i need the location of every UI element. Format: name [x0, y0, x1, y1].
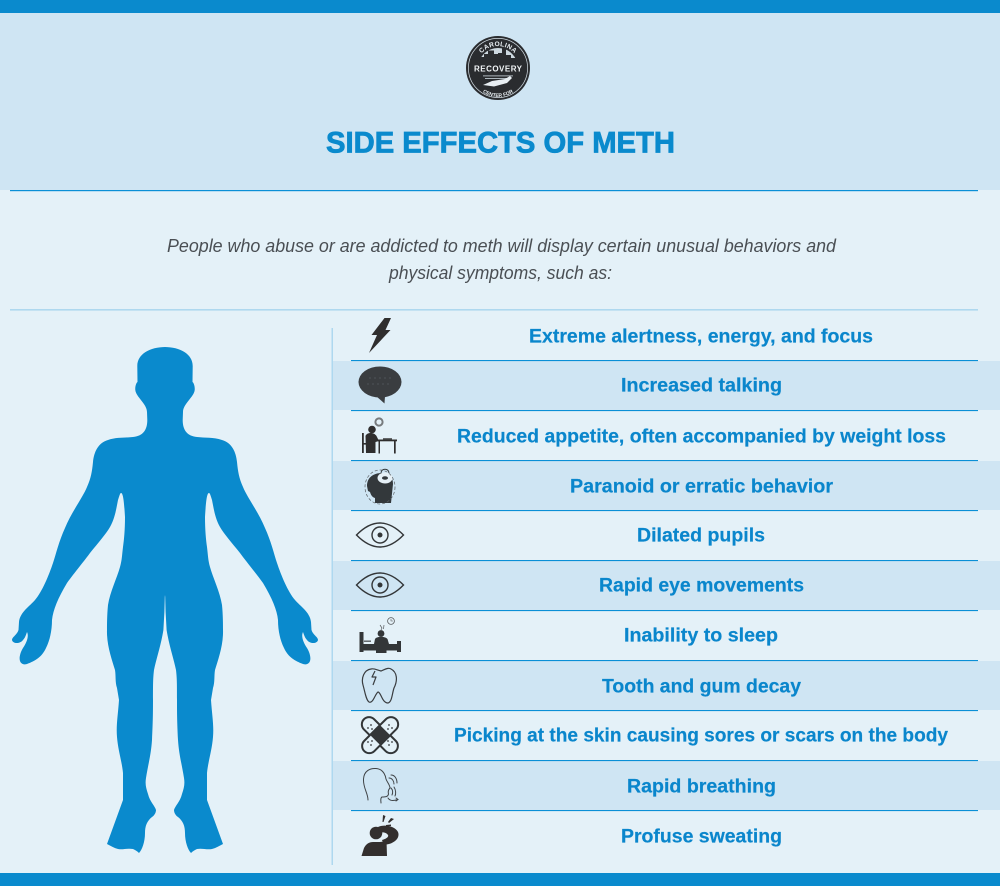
- bottom bar: [0, 873, 1000, 886]
- icon: speech bubble: [358, 366, 402, 404]
- icon: person sweating: [362, 815, 399, 856]
- row text: paranoid: Paranoid or erratic behavior: [570, 476, 834, 498]
- row text: alertness: Extreme alertness, energy, and focus: [529, 326, 873, 348]
- icon: eye (movements): [356, 573, 404, 597]
- logo: Carolina Recovery Center: CENTER FOR: [483, 90, 514, 97]
- row text: appetite: Reduced appetite, often accompanied by weight loss: [457, 426, 946, 448]
- logo: Carolina Recovery Center: CAROLINA: [479, 42, 516, 54]
- row text: breathing: Rapid breathing: [627, 776, 776, 798]
- icon: cracked tooth: [362, 668, 396, 703]
- row text: sleep: Inability to sleep: [624, 626, 778, 646]
- icon: lightning bolt: [369, 318, 391, 353]
- intro text: People who abuse or are addicted to meth will display certain unusual behaviors and: [167, 236, 837, 256]
- row text: skin: Picking at the skin causing sores or scars on the body: [454, 726, 948, 746]
- title: SIDE EFFECTS OF METH: [326, 127, 675, 160]
- row text: tooth decay: Tooth and gum decay: [602, 676, 801, 698]
- icon: crossed bandages: [359, 714, 401, 756]
- top bar: [0, 0, 1000, 13]
- icon: paranoid head: [365, 469, 395, 504]
- intro text: [167, 236, 837, 283]
- icon: eye (pupils): [356, 523, 404, 547]
- row text: talking: Increased talking: [621, 376, 782, 396]
- icon: person at table: [362, 418, 397, 454]
- logo: Carolina Recovery Center: RECOVERY: [474, 64, 523, 73]
- row text: sweating: Profuse sweating: [621, 826, 782, 848]
- row text: dilated pupils: Dilated pupils: [637, 526, 765, 546]
- icon: head breathing: [363, 768, 398, 803]
- intro text: physical symptoms, such as:: [388, 263, 612, 283]
- row text: eye movements: Rapid eye movements: [599, 576, 804, 596]
- icon: person sitting on bed: [360, 618, 401, 653]
- human body silhouette: [12, 347, 318, 853]
- logo: Carolina Recovery Center: [466, 36, 530, 100]
